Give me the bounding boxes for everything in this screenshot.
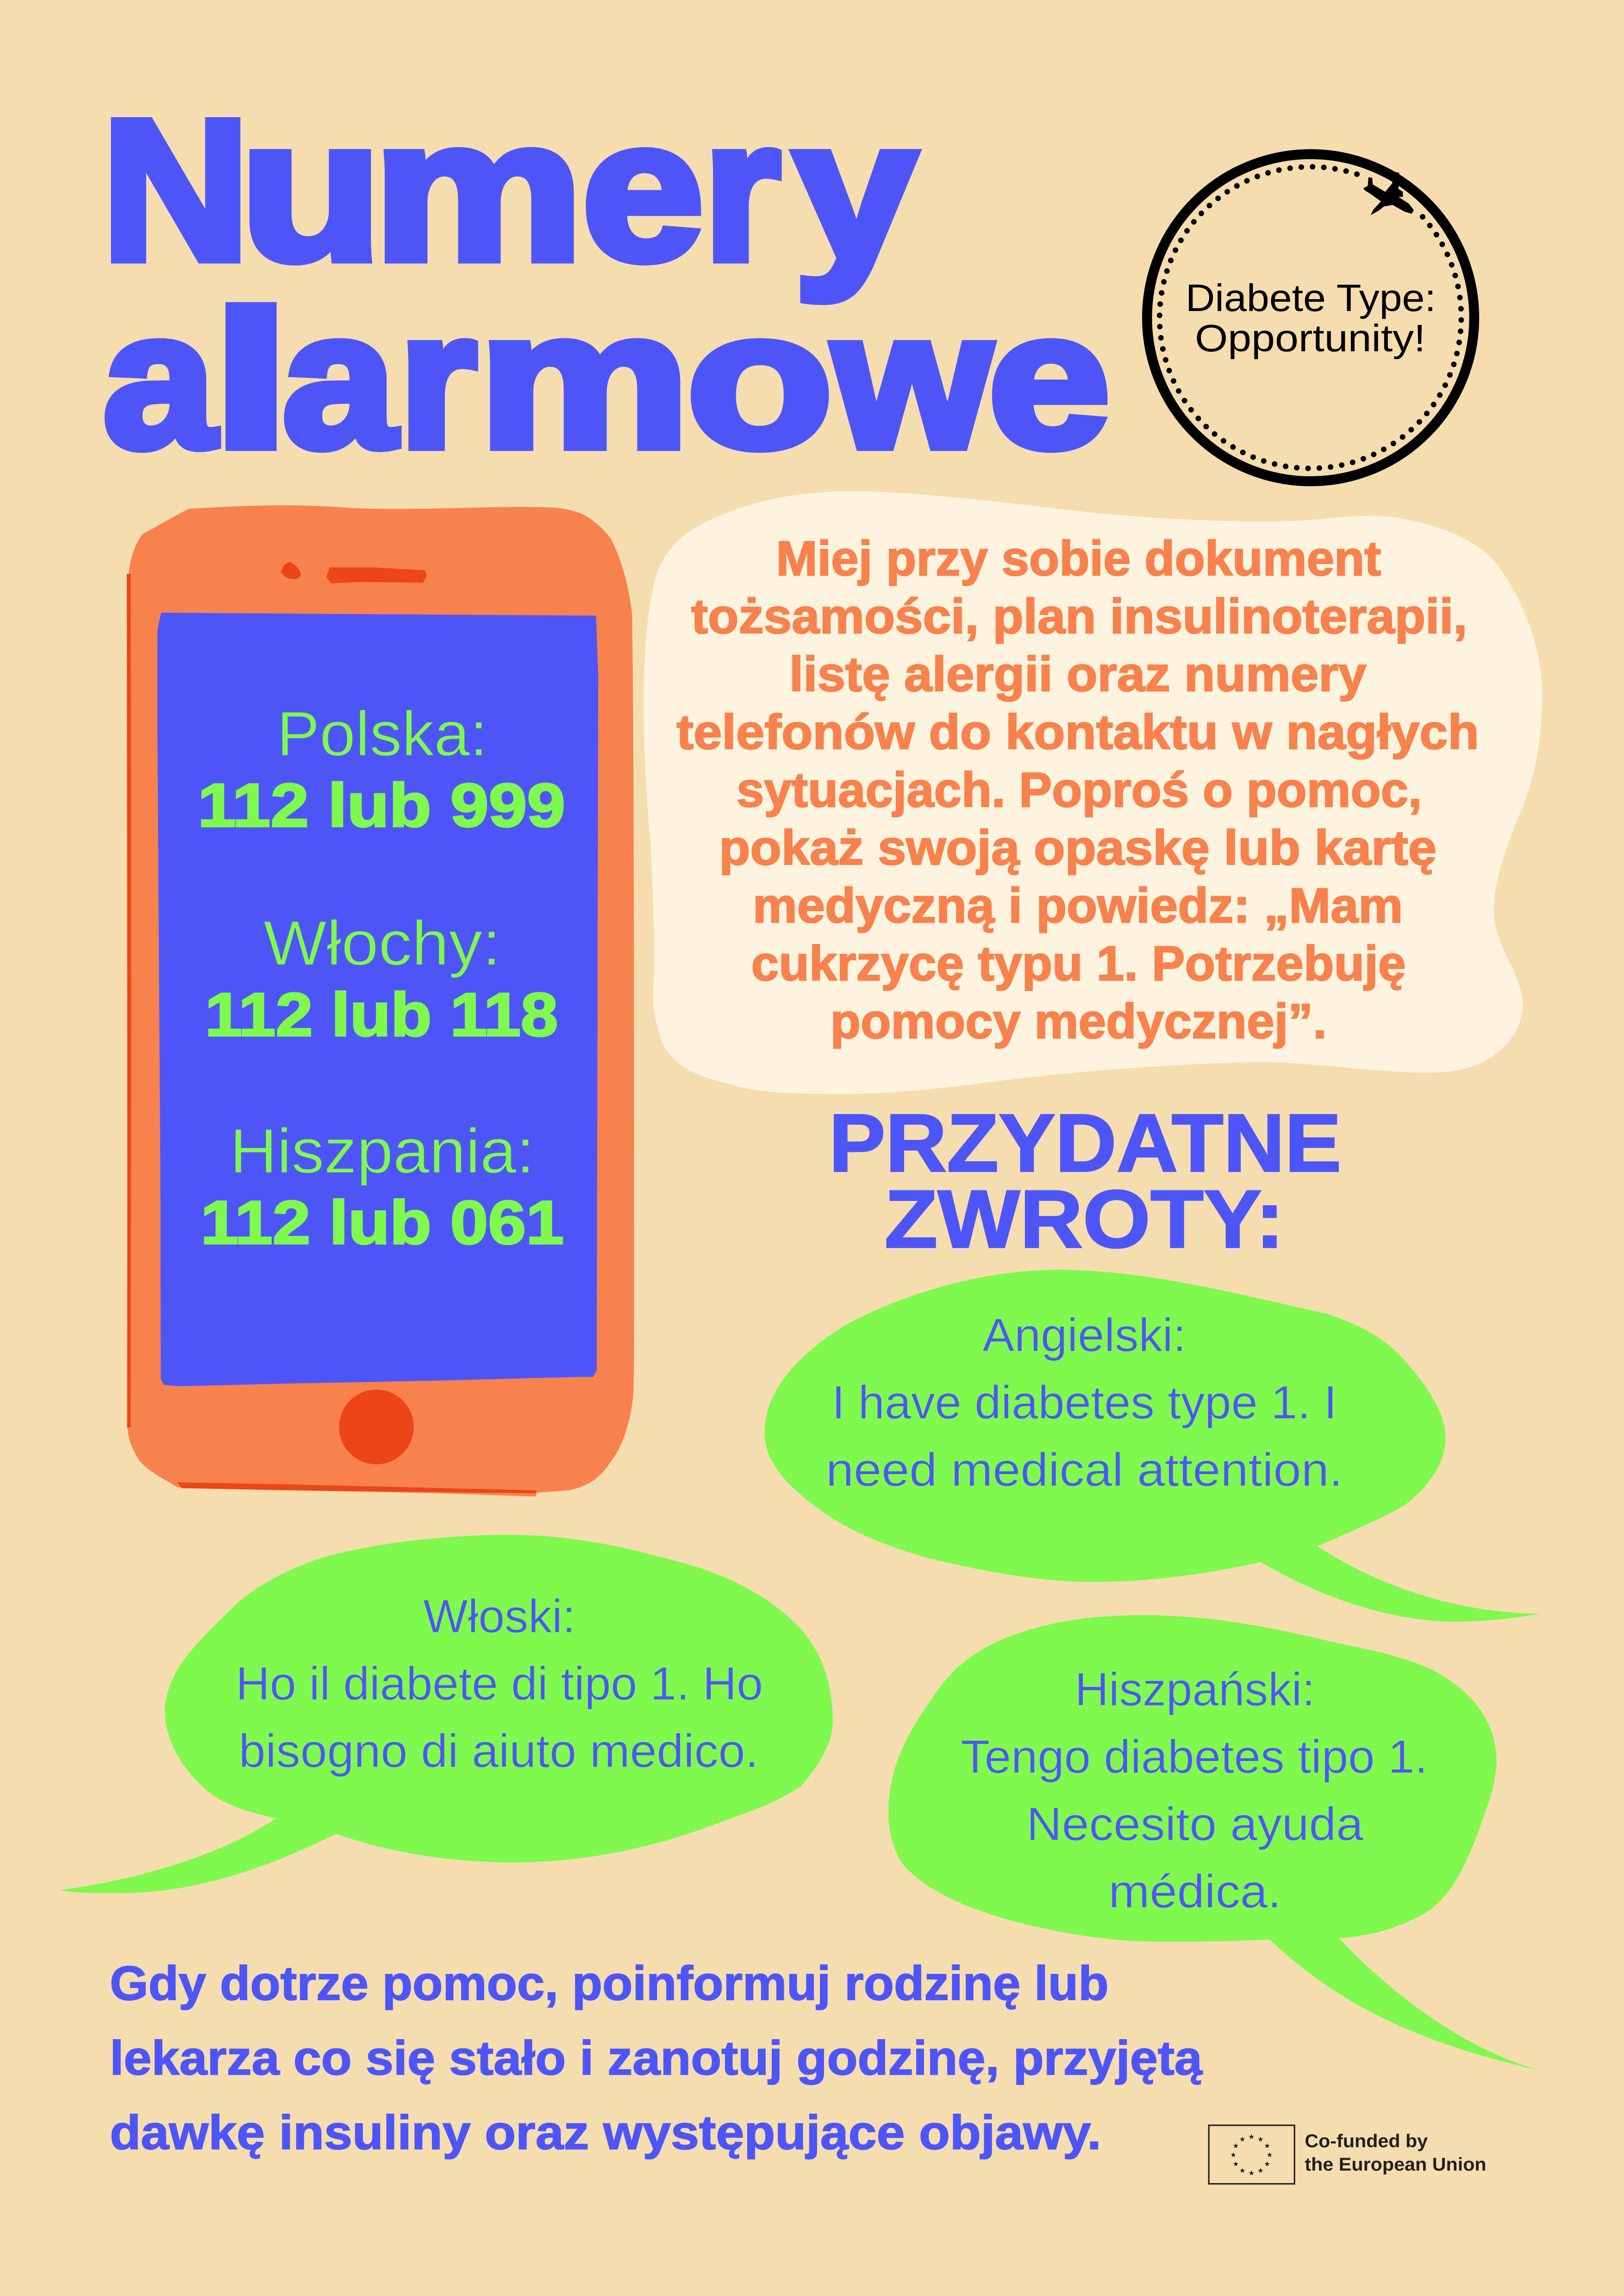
emergency numbers: Hiszpania: <box>230 1116 535 1186</box>
advice text: listę alergii oraz numery <box>789 647 1366 702</box>
emergency numbers <box>198 698 565 1257</box>
title: a <box>103 272 217 488</box>
title: u <box>240 78 382 302</box>
speech bubble: Italian <box>60 1535 833 1893</box>
title: N <box>102 78 250 302</box>
Italian phrase: bisogno di aiuto medico. <box>239 1725 759 1777</box>
camera dot <box>281 562 301 579</box>
advice text: tożsamości, plan insulinoterapii, <box>691 589 1468 644</box>
funding statement: the European Union <box>1305 2154 1487 2175</box>
Spanish phrase: Necesito ayuda <box>1026 1798 1364 1850</box>
Italian phrase: Włoski: <box>423 1590 575 1643</box>
advice text: pomocy medycznej”. <box>831 994 1327 1049</box>
title: y <box>793 78 918 303</box>
Spanish phrase: médica. <box>1109 1866 1281 1918</box>
closing text: lekarza co się stało i zanotuj godzinę, przyjętą <box>110 2031 1203 2085</box>
phone body <box>127 505 634 1497</box>
Spanish phrase: Tengo diabetes tipo 1. <box>961 1731 1428 1783</box>
title: o <box>687 272 833 488</box>
English phrase: Angielski: <box>983 1309 1186 1362</box>
title: m <box>479 272 690 488</box>
Italian phrase <box>236 1590 763 1777</box>
Italian phrase: Ho il diabete di tipo 1. Ho <box>236 1658 763 1710</box>
emergency numbers: 112 lub 061 <box>200 1188 564 1257</box>
EU flag outline with stars <box>1209 2125 1294 2184</box>
Spanish phrase: Hiszpański: <box>1075 1663 1315 1716</box>
heading: useful phrases <box>829 1097 1342 1265</box>
home button <box>339 1390 414 1464</box>
advice text: cukrzycę typu 1. Potrzebuję <box>751 936 1406 991</box>
closing text: dawkę insuliny oraz występujące objawy. <box>110 2106 1101 2160</box>
advice text: telefonów do kontaktu w nagłych <box>676 705 1479 759</box>
title: l <box>212 272 290 488</box>
speaker <box>326 567 427 584</box>
advice text: Miej przy sobie dokument <box>776 531 1381 586</box>
phone edge highlight <box>127 574 536 1493</box>
English phrase: I have diabetes type 1. I <box>832 1376 1337 1429</box>
title: m <box>374 78 583 302</box>
title: w <box>830 272 992 488</box>
speech bubble: English <box>765 1270 1541 1622</box>
English phrase <box>826 1309 1343 1496</box>
panel: advice blob <box>643 491 1542 1094</box>
heading: useful phrases: PRZYDATNE <box>829 1097 1342 1189</box>
speech bubble: Spanish <box>888 1615 1541 2071</box>
title: r <box>704 78 781 302</box>
advice text <box>676 531 1479 1049</box>
title: a <box>282 272 397 488</box>
phone illustration <box>127 505 634 1497</box>
heading: useful phrases: ZWROTY: <box>885 1173 1284 1265</box>
icon: airplane <box>1363 172 1414 215</box>
advice text: medyczną i powiedz: „Mam <box>753 878 1403 933</box>
funding statement <box>1305 2131 1487 2175</box>
title: e <box>988 272 1110 488</box>
emergency numbers: 112 lub 118 <box>205 981 558 1049</box>
advice text: pokaż swoją opaskę lub kartę <box>719 821 1437 875</box>
emergency numbers: Włochy: <box>263 908 501 978</box>
English phrase: need medical attention. <box>826 1444 1343 1496</box>
title <box>102 78 1110 488</box>
badge: Diabete Type Opportunity: Diabete Type: <box>1186 277 1436 319</box>
funding statement: Co-funded by <box>1305 2131 1428 2152</box>
badge: Diabete Type Opportunity: Opportunity! <box>1195 317 1425 360</box>
screen <box>157 613 598 1386</box>
advice text: sytuacjach. Poproś o pomoc, <box>737 763 1422 817</box>
closing text: Gdy dotrze pomoc, poinformuj rodzinę lub <box>110 1957 1109 2010</box>
closing text <box>110 1957 1203 2160</box>
emergency numbers: 112 lub 999 <box>198 772 565 840</box>
title: e <box>582 78 704 302</box>
title: r <box>399 272 477 488</box>
EU co-funding logo <box>1209 2125 1487 2184</box>
badge: Diabete Type Opportunity <box>1147 154 1474 481</box>
Spanish phrase <box>961 1663 1428 1918</box>
emergency numbers: Polska: <box>277 698 487 769</box>
